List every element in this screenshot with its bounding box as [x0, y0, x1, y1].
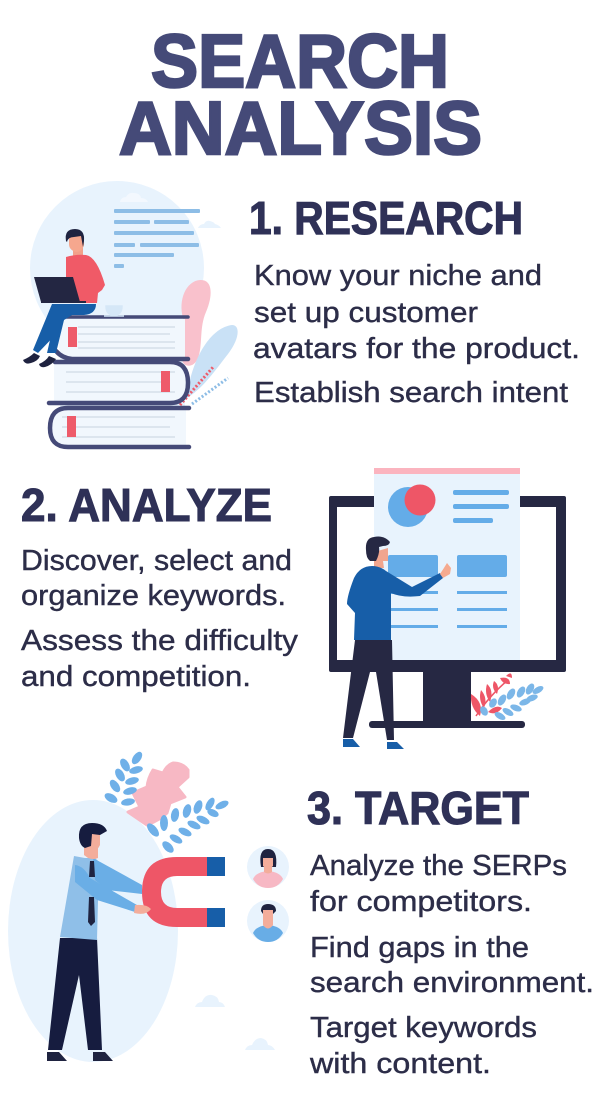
text lines on panel — [114, 209, 200, 268]
title: SEARCH — [151, 19, 449, 103]
pink feather — [182, 280, 211, 366]
step 2 text: and competition. — [21, 661, 251, 693]
step 3 text: with content. — [309, 1048, 491, 1080]
title — [119, 19, 482, 170]
step 1 text: Know your niche and — [254, 260, 542, 292]
blue feather — [187, 325, 238, 398]
step 1 text — [253, 260, 580, 409]
illustration: person on books — [23, 181, 238, 447]
illustration: magnet — [8, 750, 289, 1062]
avatar: woman — [247, 846, 289, 888]
step 3 text: for competitors. — [310, 886, 532, 918]
top book — [56, 317, 188, 359]
presenter — [343, 537, 451, 749]
businessman — [47, 823, 151, 1061]
step 3 text: Find gaps in the — [310, 932, 529, 964]
middle book — [49, 362, 188, 403]
pink leaf — [128, 763, 188, 825]
coffee cup — [104, 306, 124, 316]
step 3 text: Analyze the SERPs — [310, 850, 567, 882]
person with laptop — [23, 229, 105, 367]
step 1 text: Establish search intent — [254, 377, 568, 409]
avatar: man — [247, 900, 289, 942]
step 3 text: Target keywords — [310, 1012, 537, 1044]
document — [374, 468, 520, 660]
step 1 text: avatars for the product. — [253, 333, 580, 365]
step 1 text: set up customer — [254, 297, 478, 329]
magnet body — [142, 857, 225, 927]
blue sprigs — [103, 750, 230, 855]
step 3 text: search environment. — [310, 967, 594, 999]
step 2 heading: 2. ANALYZE — [21, 479, 272, 531]
step 2 text: Discover, select and — [21, 545, 292, 577]
step 1 heading: 1. RESEARCH — [249, 192, 523, 244]
plant — [471, 673, 545, 722]
step 2 text — [21, 545, 299, 693]
step 3 heading: 3. TARGET — [307, 782, 529, 834]
title: ANALYSIS — [119, 86, 482, 170]
step 2 text: Assess the difficulty — [21, 625, 299, 657]
bottom book — [50, 408, 189, 447]
step 2 text: organize keywords. — [21, 580, 286, 612]
illustration: monitor and presenter — [329, 468, 566, 749]
step 3 text — [309, 850, 594, 1080]
